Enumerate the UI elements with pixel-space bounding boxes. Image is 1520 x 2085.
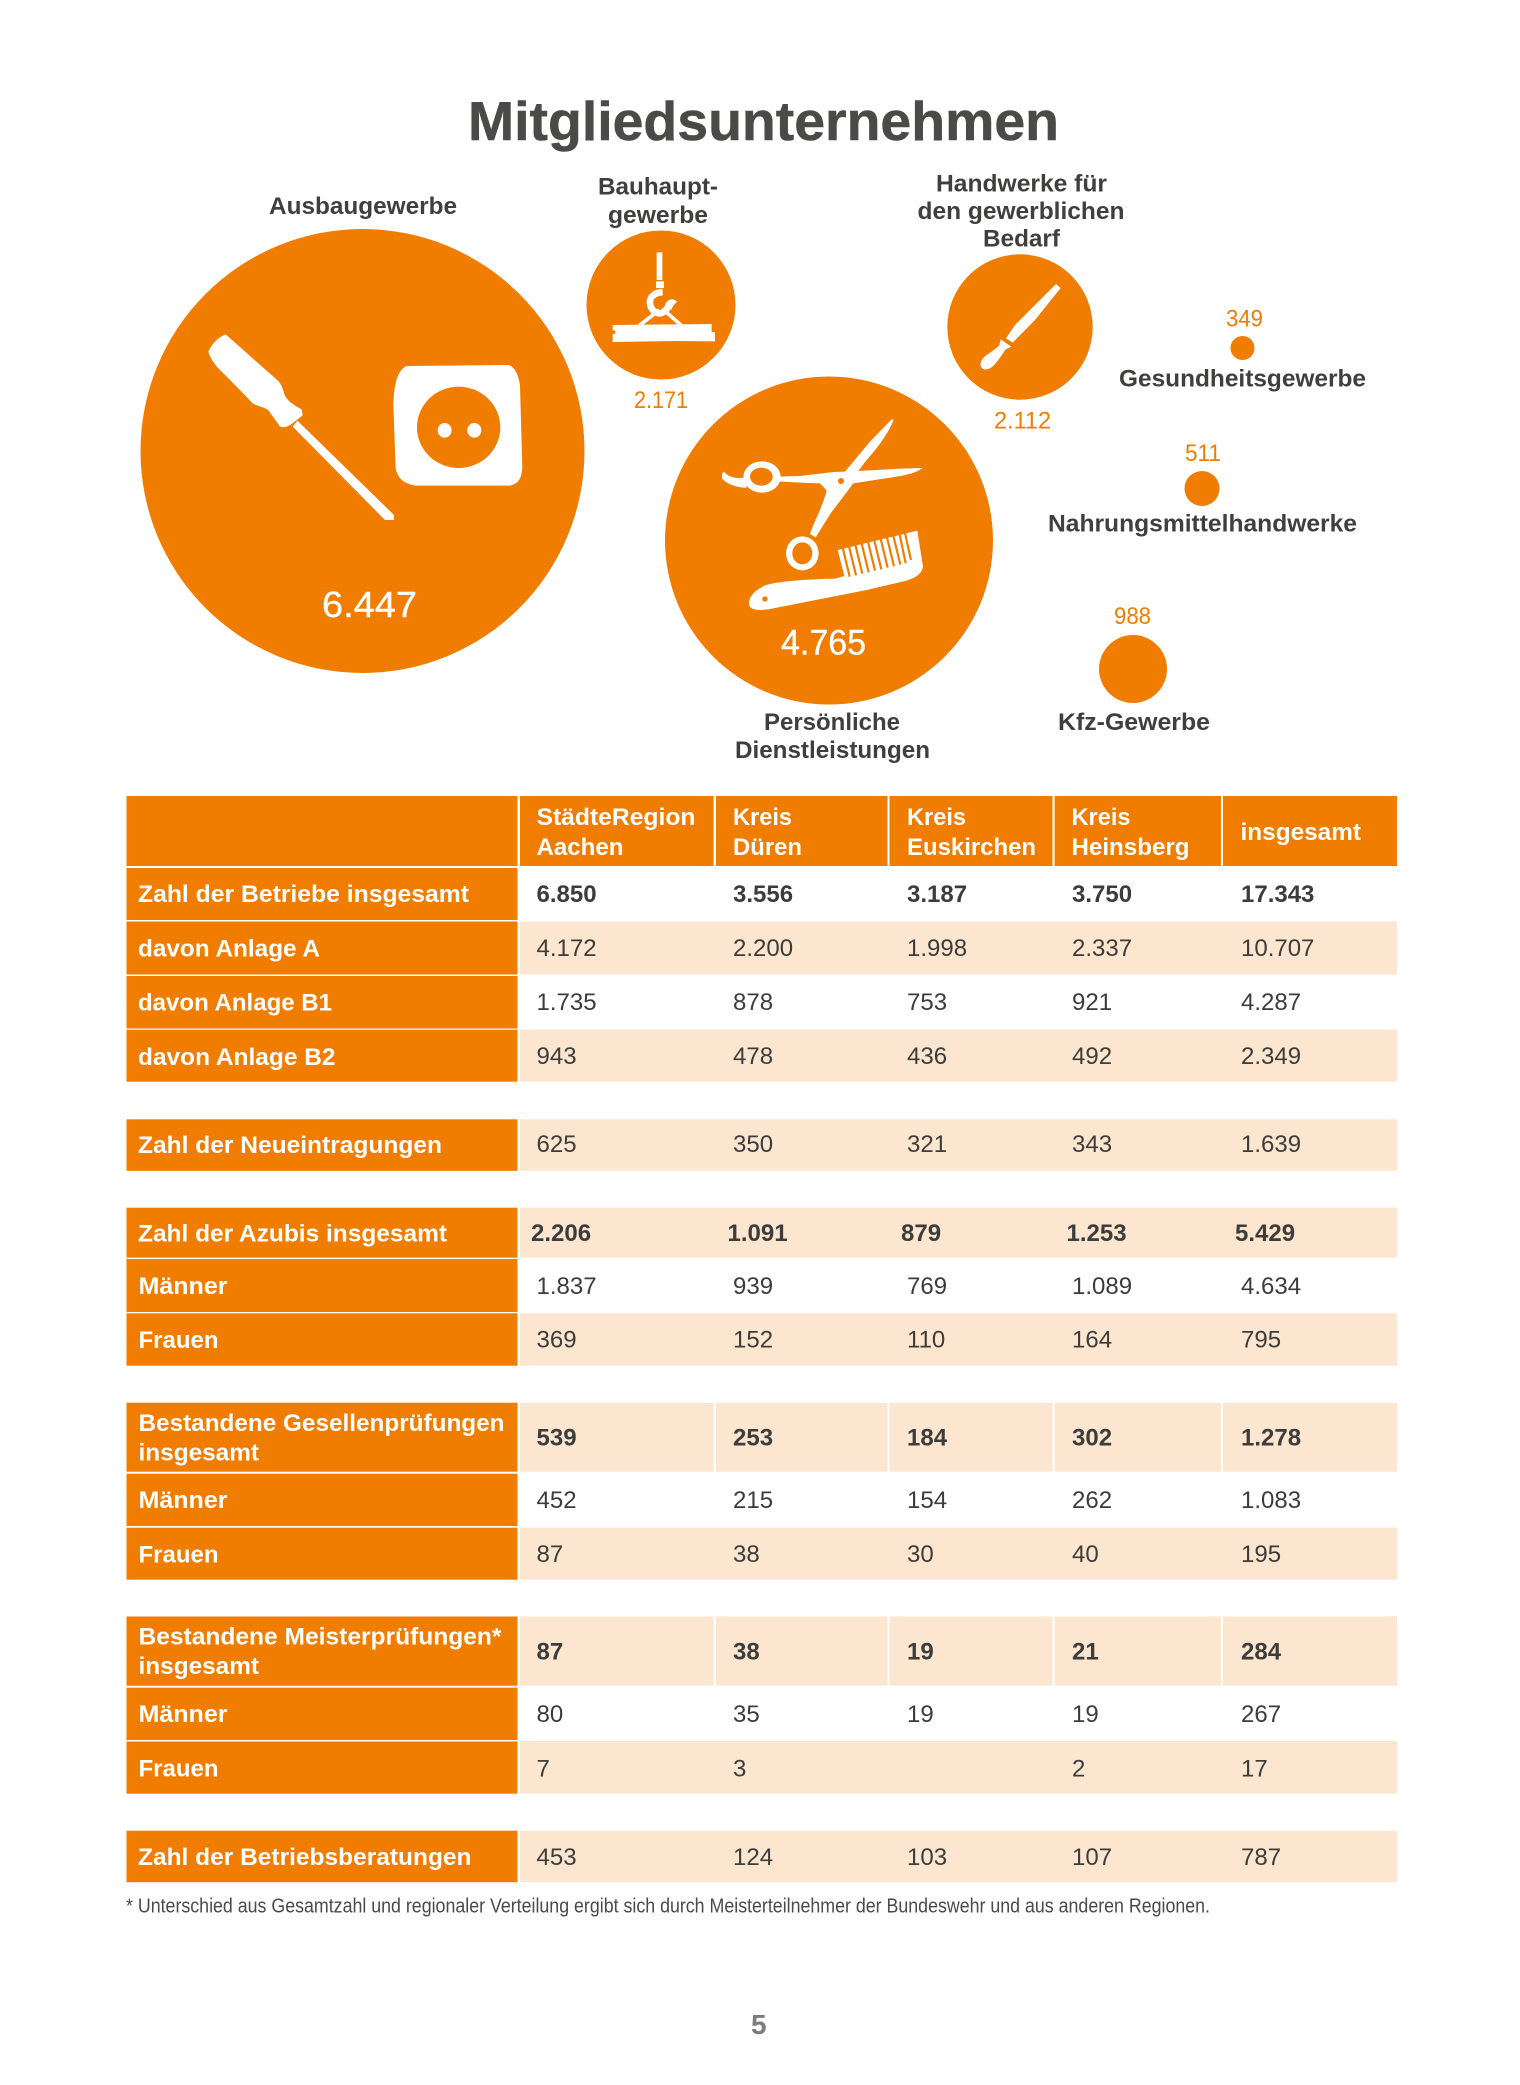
- row: Gesellen Frauen: 87: [536, 1541, 563, 1568]
- row: davon Anlage B1: [126, 976, 1301, 1028]
- row: Zahl der Neueintragungen: 343: [1072, 1131, 1112, 1158]
- row: Zahl der Betriebe insgesamt: 3.187: [907, 881, 967, 908]
- icon: crane hook with beam: [613, 252, 715, 342]
- row: davon Anlage A: davon Anlage A: [138, 936, 320, 962]
- bubble: Kfz-Gewerbe: Kfz-Gewerbe: [1058, 709, 1210, 736]
- bubble: Persönliche Dienstleistungen: 4.765: [781, 624, 866, 662]
- row: Bestandene Meisterprüfungen insgesamt: 87: [536, 1638, 563, 1666]
- row: Gesellen Männer: [126, 1474, 1301, 1526]
- title: Mitgliedsunternehmen: [468, 90, 1059, 152]
- row: Gesellen Männer: Männer: [138, 1487, 228, 1514]
- bubble: Handwerke für den gewerblichen Bedarf: [918, 170, 1124, 434]
- row: davon Anlage B1: 4.287: [1241, 989, 1301, 1016]
- row: Zahl der Neueintragungen: [126, 1119, 1397, 1171]
- row: Bestandene Gesellenprüfungen insgesamt: insgesamt: [138, 1440, 259, 1466]
- bubble: Handwerke für den gewerblichen Bedarf: Handwerke für: [936, 170, 1107, 198]
- bubble: Nahrungsmittelhandwerke: 511: [1185, 440, 1221, 467]
- row: Zahl der Betriebe insgesamt: 17.343: [1241, 881, 1314, 908]
- footnote: * Unterschied aus Gesamtzahl und regionaler Verteilung ergibt sich durch Meisterteilnehmer der Bundeswehr und aus anderen Regionen.: [126, 1894, 1210, 1918]
- bubble: Ausbaugewerbe: [140, 193, 584, 673]
- row: Bestandene Meisterprüfungen insgesamt: 19: [907, 1638, 934, 1666]
- row: Zahl der Neueintragungen: 1.639: [1241, 1131, 1301, 1158]
- row: Bestandene Gesellenprüfungen insgesamt: 253: [733, 1424, 773, 1452]
- row: Gesellen Männer: 452: [536, 1487, 577, 1514]
- bubble: Nahrungsmittelhandwerke: Nahrungsmittelhandwerke: [1048, 510, 1357, 538]
- bubble: Persönliche Dienstleistungen: Dienstleistungen: [735, 737, 930, 764]
- row: Bestandene Gesellenprüfungen insgesamt: Bestandene Gesellenprüfungen: [138, 1410, 505, 1437]
- row: Bestandene Gesellenprüfungen insgesamt: 539: [536, 1424, 577, 1452]
- row: Zahl der Betriebsberatungen: [126, 1831, 1397, 1882]
- row: Bestandene Meisterprüfungen insgesamt: 38: [733, 1638, 760, 1666]
- row: Bestandene Meisterprüfungen insgesamt: insgesamt: [138, 1653, 259, 1680]
- row: Meister Männer: 80: [536, 1701, 563, 1728]
- row: davon Anlage B2: davon Anlage B2: [138, 1044, 336, 1071]
- row: Zahl der Neueintragungen: 321: [907, 1131, 947, 1158]
- row: Gesellen Frauen: 40: [1072, 1541, 1099, 1568]
- row: Zahl der Azubis insgesamt: [126, 1208, 1397, 1258]
- bubble: Handwerke für den gewerblichen Bedarf: 2.112: [994, 408, 1051, 434]
- row: Azubis Männer: Männer: [138, 1273, 228, 1300]
- row: Meister Männer: 19: [907, 1701, 934, 1728]
- bubble: Handwerke für den gewerblichen Bedarf: den gewerblichen: [918, 198, 1124, 225]
- row: Azubis Frauen: [126, 1313, 1397, 1366]
- bubble: Kfz-Gewerbe: 988: [1114, 603, 1151, 630]
- row: davon Anlage B2: [126, 1030, 1397, 1082]
- row: davon Anlage A: 4.172: [536, 935, 597, 962]
- row: Meister Männer: 35: [733, 1701, 760, 1728]
- row: Meister Männer: [126, 1688, 1281, 1740]
- row: davon Anlage B2: 436: [907, 1043, 947, 1070]
- bubble: Kfz-Gewerbe: [1058, 603, 1210, 736]
- row: Gesellen Frauen: 195: [1241, 1541, 1281, 1568]
- table header: Euskirchen: [907, 834, 1036, 861]
- row: Zahl der Betriebe insgesamt: 6.850: [536, 881, 597, 908]
- page number: 5: [751, 2009, 767, 2040]
- row: Gesellen Männer: 262: [1072, 1487, 1112, 1514]
- bubble: Gesundheitsgewerbe: [1119, 306, 1366, 392]
- bubble: Gesundheitsgewerbe: Gesundheitsgewerbe: [1119, 366, 1366, 392]
- row: Bestandene Meisterprüfungen insgesamt: 21: [1072, 1638, 1099, 1666]
- table header: [126, 796, 1397, 866]
- row: Meister Frauen: [126, 1741, 1397, 1794]
- row: davon Anlage B1: 753: [907, 989, 947, 1016]
- row: Zahl der Neueintragungen: 350: [733, 1131, 773, 1158]
- row: Azubis Frauen: 152: [733, 1326, 773, 1354]
- row: Meister Männer: 19: [1072, 1701, 1099, 1728]
- table header: Kreis: [907, 804, 966, 831]
- row: davon Anlage A: [126, 922, 1397, 974]
- row: Azubis Frauen: 110: [907, 1326, 945, 1354]
- row: davon Anlage B2: 2.349: [1241, 1043, 1301, 1070]
- bubble: Nahrungsmittelhandwerke: [1048, 440, 1357, 538]
- row: Azubis Männer: 939: [733, 1273, 773, 1300]
- row: Gesellen Frauen: 30: [907, 1541, 934, 1568]
- row: Zahl der Azubis insgesamt: 879: [901, 1220, 941, 1247]
- row: Zahl der Azubis insgesamt: 1.253: [1066, 1220, 1127, 1247]
- row: Meister Männer: Männer: [138, 1701, 228, 1728]
- row: Bestandene Meisterprüfungen insgesamt: Bestandene Meisterprüfungen*: [138, 1624, 502, 1650]
- row: davon Anlage B2: 492: [1072, 1043, 1112, 1070]
- bubble: Bauhauptgewerbe: gewerbe: [608, 202, 708, 229]
- bubble: Persönliche Dienstleistungen: [665, 376, 993, 764]
- row: Azubis Frauen: Frauen: [138, 1327, 218, 1354]
- row: davon Anlage A: 2.337: [1072, 935, 1132, 962]
- row: Zahl der Betriebsberatungen: 453: [536, 1844, 577, 1871]
- row: Zahl der Azubis insgesamt: 1.091: [728, 1220, 788, 1247]
- row: Bestandene Gesellenprüfungen insgesamt: 1.278: [1241, 1424, 1301, 1452]
- row: Meister Frauen: 2: [1072, 1756, 1085, 1782]
- data table: [126, 796, 1397, 1882]
- row: Azubis Männer: 1.837: [536, 1273, 597, 1300]
- row: Bestandene Gesellenprüfungen insgesamt: 302: [1072, 1424, 1112, 1452]
- table header: insgesamt: [1240, 819, 1361, 846]
- row: davon Anlage A: 2.200: [733, 935, 793, 962]
- row: Zahl der Neueintragungen: Zahl der Neueintragungen: [138, 1132, 442, 1159]
- row: Zahl der Azubis insgesamt: Zahl der Azubis insgesamt: [138, 1220, 447, 1248]
- icon: screwdriver: [208, 334, 394, 520]
- row: Zahl der Betriebe insgesamt: Zahl der Betriebe insgesamt: [138, 881, 469, 908]
- row: Meister Frauen: Frauen: [138, 1756, 218, 1782]
- row: davon Anlage B1: 878: [733, 989, 773, 1016]
- row: Zahl der Betriebsberatungen: 787: [1241, 1844, 1281, 1871]
- bubble: Handwerke für den gewerblichen Bedarf: Bedarf: [983, 226, 1061, 252]
- row: Azubis Männer: 4.634: [1241, 1273, 1301, 1300]
- row: Zahl der Betriebsberatungen: 124: [733, 1844, 773, 1871]
- row: Zahl der Azubis insgesamt: 2.206: [531, 1220, 591, 1247]
- row: Azubis Frauen: 795: [1241, 1326, 1281, 1354]
- icon: scissors: [722, 419, 923, 570]
- row: Azubis Männer: 769: [907, 1273, 947, 1300]
- table header: Kreis: [1072, 804, 1130, 831]
- bubble: Gesundheitsgewerbe: 349: [1226, 306, 1263, 332]
- table header: Kreis: [733, 804, 792, 831]
- row: davon Anlage B1: 1.735: [536, 989, 597, 1016]
- row: Azubis Frauen: 369: [536, 1326, 577, 1354]
- row: davon Anlage B1: 921: [1072, 989, 1112, 1016]
- table header: Heinsberg: [1072, 834, 1190, 861]
- row: Zahl der Betriebe insgesamt: [126, 868, 1314, 920]
- row: Gesellen Männer: 154: [907, 1487, 947, 1514]
- row: Gesellen Männer: 1.083: [1241, 1487, 1301, 1514]
- row: Azubis Männer: [126, 1259, 1301, 1312]
- row: Gesellen Frauen: [126, 1528, 1397, 1580]
- row: Gesellen Männer: 215: [733, 1487, 773, 1514]
- table header: Aachen: [536, 834, 624, 861]
- bubble: Ausbaugewerbe: 6.447: [322, 584, 417, 625]
- row: Meister Frauen: 3: [733, 1756, 746, 1782]
- row: Meister Frauen: 7: [536, 1756, 550, 1782]
- bubble: Bauhauptgewerbe: 2.171: [634, 387, 688, 414]
- row: Zahl der Betriebsberatungen: Zahl der Betriebsberatungen: [138, 1844, 472, 1871]
- row: Zahl der Betriebsberatungen: 107: [1072, 1844, 1112, 1871]
- row: Azubis Männer: 1.089: [1072, 1273, 1132, 1300]
- row: Meister Männer: 267: [1241, 1701, 1281, 1728]
- row: Zahl der Azubis insgesamt: 5.429: [1235, 1220, 1295, 1247]
- bubble: Bauhauptgewerbe: Bauhaupt-: [598, 174, 718, 200]
- row: Zahl der Betriebsberatungen: 103: [907, 1844, 947, 1871]
- row: Bestandene Meisterprüfungen insgesamt: [126, 1616, 1397, 1686]
- row: Bestandene Gesellenprüfungen insgesamt: [126, 1403, 1397, 1472]
- icon: power socket: [393, 365, 522, 486]
- row: Bestandene Meisterprüfungen insgesamt: 284: [1241, 1638, 1282, 1666]
- row: Zahl der Neueintragungen: 625: [536, 1131, 577, 1158]
- row: davon Anlage A: 10.707: [1241, 935, 1314, 962]
- row: davon Anlage B2: 943: [536, 1043, 577, 1070]
- table header: Düren: [733, 834, 802, 861]
- icon: comb: [749, 531, 923, 610]
- row: Gesellen Frauen: 38: [733, 1541, 760, 1568]
- row: Azubis Frauen: 164: [1072, 1326, 1112, 1354]
- row: Zahl der Betriebe insgesamt: 3.750: [1072, 881, 1132, 908]
- row: Zahl der Betriebe insgesamt: 3.556: [733, 881, 793, 908]
- row: davon Anlage B1: davon Anlage B1: [138, 990, 332, 1016]
- bubble: Persönliche Dienstleistungen: Persönliche: [764, 709, 900, 736]
- icon: file tool: [980, 284, 1061, 369]
- row: davon Anlage B2: 478: [733, 1043, 773, 1070]
- table header: StädteRegion: [536, 804, 696, 831]
- bubble: Bauhauptgewerbe: [586, 174, 736, 414]
- bubble: Ausbaugewerbe: Ausbaugewerbe: [269, 193, 457, 220]
- row: Bestandene Gesellenprüfungen insgesamt: 184: [907, 1424, 948, 1452]
- row: davon Anlage A: 1.998: [907, 935, 967, 962]
- row: Meister Frauen: 17: [1241, 1756, 1268, 1782]
- row: Gesellen Frauen: Frauen: [138, 1542, 218, 1568]
